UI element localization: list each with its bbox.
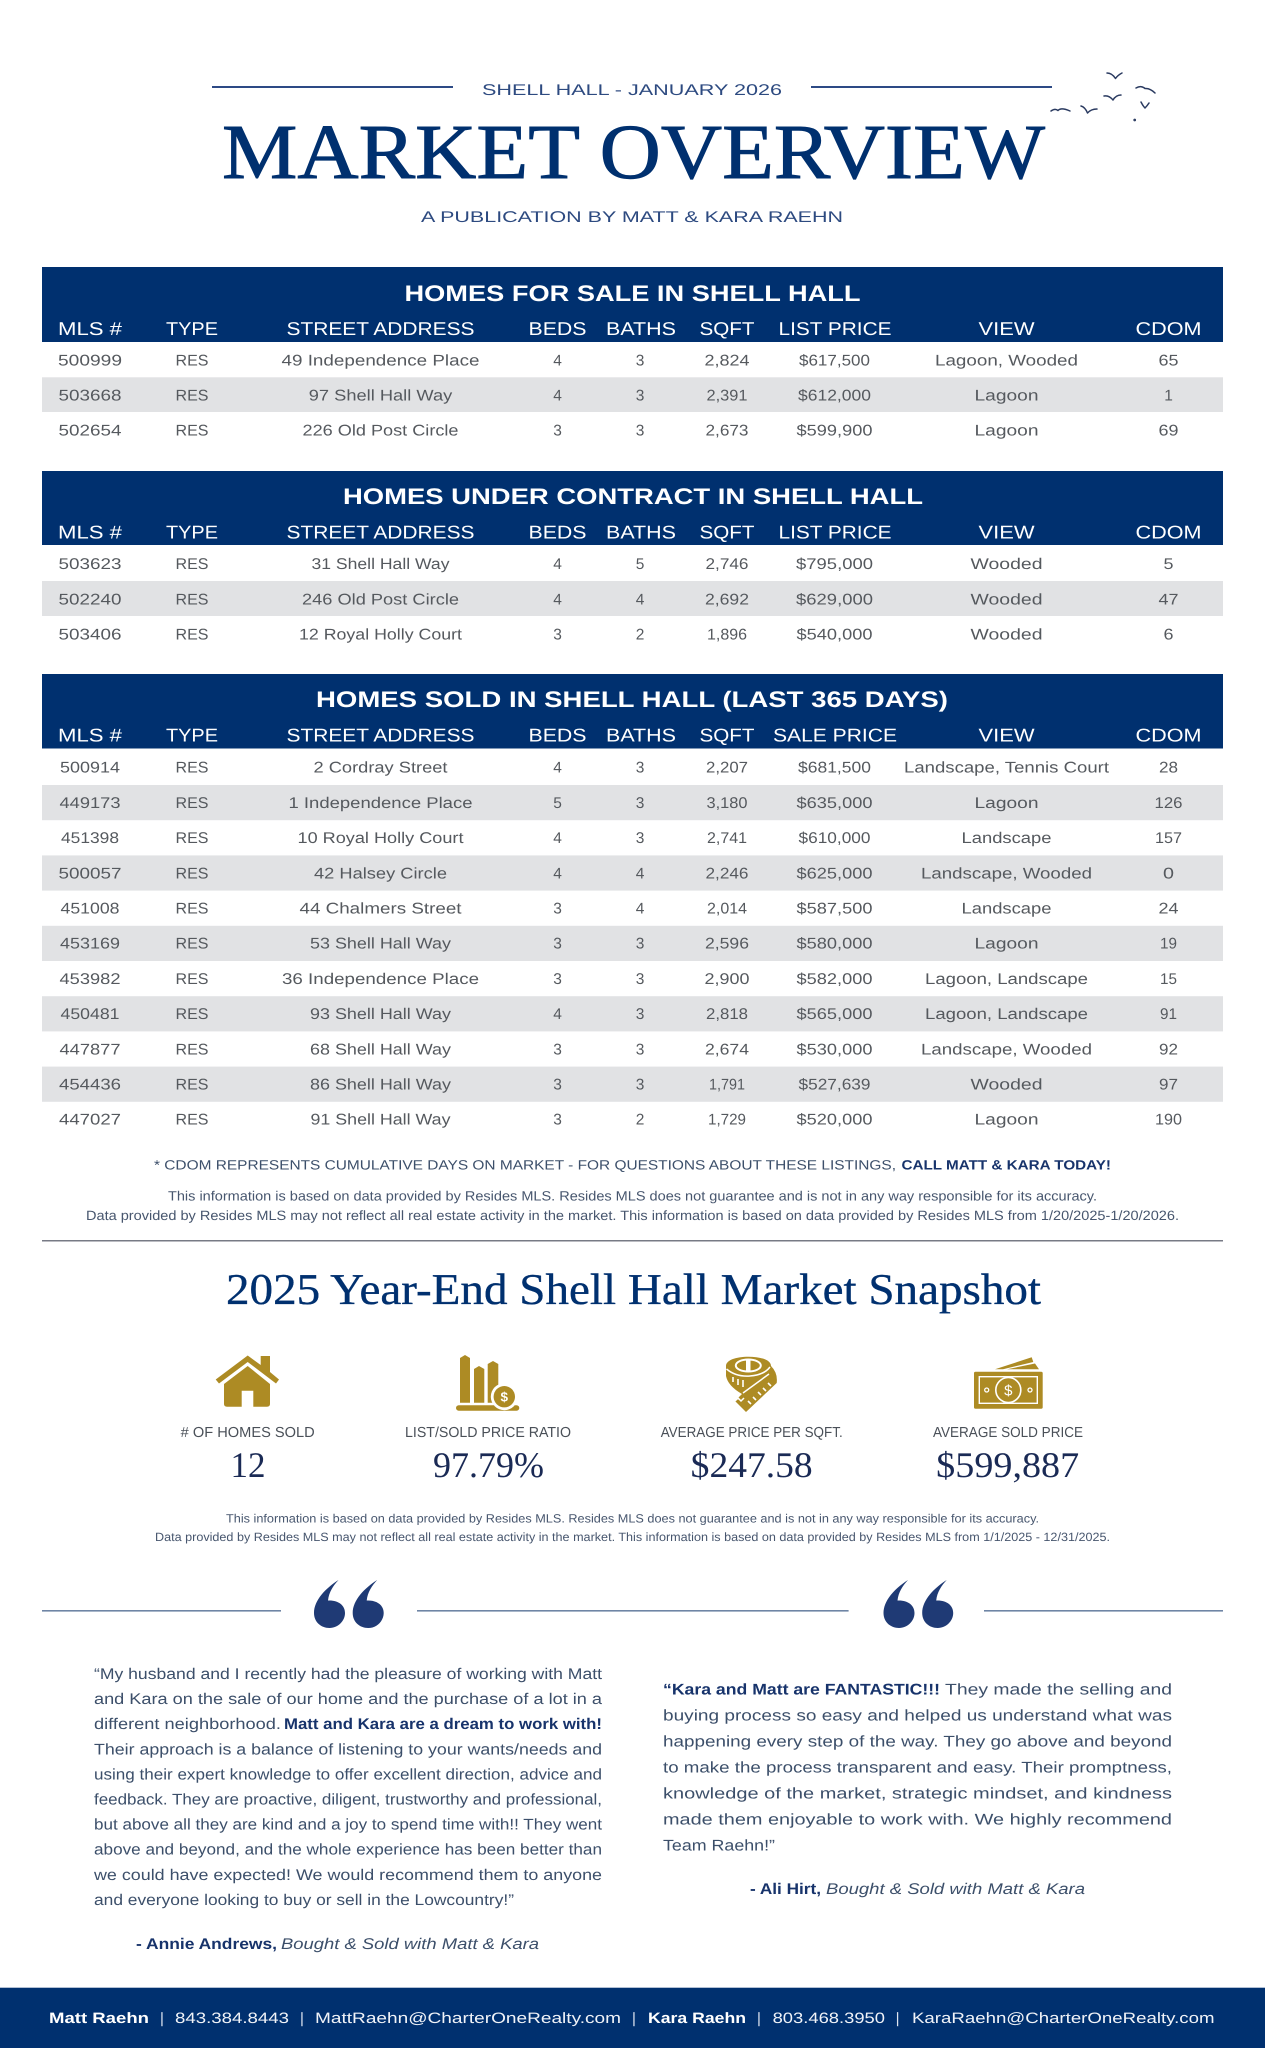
row: 500914 bbox=[60, 760, 1178, 777]
icon: banknotes: $ bbox=[1004, 1382, 1013, 1400]
row: 453982: Lagoon, Landscape bbox=[925, 971, 1088, 988]
row: 449173: 126 bbox=[1154, 795, 1182, 812]
row: 449173: 1 Independence Place bbox=[288, 795, 472, 812]
row: 451008: 44 Chalmers Street bbox=[300, 900, 462, 918]
row: 453169: 3 bbox=[636, 936, 644, 953]
column headers: VIEW bbox=[978, 724, 1035, 746]
row: 451398: Landscape bbox=[962, 830, 1052, 847]
row: 500057: 500057 bbox=[58, 865, 122, 882]
row: 451398: 451398 bbox=[61, 830, 119, 847]
testimonial: Ali Hirt: Team Raehn!” bbox=[663, 1837, 775, 1854]
disclaimer: snapshot data bbox=[155, 1512, 1110, 1544]
row: 500057: 4 bbox=[636, 865, 645, 882]
row: 503668 bbox=[58, 388, 1173, 405]
row: 451398 bbox=[61, 830, 1182, 847]
row: 500914: 4 bbox=[553, 760, 562, 777]
row: 447027: 1,729 bbox=[708, 1112, 746, 1129]
row: 451008 bbox=[60, 900, 1179, 918]
row: 502240: 502240 bbox=[58, 591, 122, 608]
label: AVERAGE SOLD PRICE bbox=[933, 1425, 1083, 1441]
testimonial: Ali Hirt: knowledge of the market, strategic mindset, and kindness bbox=[663, 1785, 1172, 1802]
row: 451398: 10 Royal Holly Court bbox=[298, 830, 464, 847]
row: 500914: 28 bbox=[1159, 760, 1178, 777]
row: 453982 bbox=[60, 971, 1177, 988]
row: 453982: 2,900 bbox=[704, 971, 750, 988]
column headers: MLS # bbox=[58, 724, 123, 746]
row: 500057: 42 Halsey Circle bbox=[314, 865, 447, 882]
row: 502240: 4 bbox=[636, 591, 645, 608]
footer: contact bar: Kara Raehn bbox=[648, 2010, 746, 2027]
row: 500057: 4 bbox=[553, 865, 562, 882]
row: 500914: RES bbox=[176, 760, 208, 777]
testimonial: Ali Hirt: to make the process transparent and easy. Their promptness, bbox=[663, 1759, 1172, 1776]
testimonial: Annie Andrews: different neighborhood. bbox=[94, 1716, 281, 1733]
stat: list/sold price ratio bbox=[405, 1355, 571, 1485]
row: 502240: 47 bbox=[1158, 591, 1178, 608]
row: 447877: $530,000 bbox=[796, 1041, 873, 1058]
row: 503623: 5 bbox=[1164, 556, 1174, 573]
row: 450481 bbox=[60, 1006, 1177, 1023]
footnote: CDOM note and call to action bbox=[154, 1158, 1111, 1172]
disclaimer: listings data: Data provided by Resides MLS may not reflect all real estate activity in the market. This information is based on data provided by Resides MLS from 1/20/2025-1/20/2026. bbox=[86, 1208, 1179, 1223]
row: 453169: 2,596 bbox=[705, 936, 749, 953]
row: 503668: $612,000 bbox=[798, 388, 871, 405]
testimonial: Annie Andrews: “My husband and I recently had the pleasure of working with Matt bbox=[94, 1666, 603, 1683]
row: 453982: $582,000 bbox=[796, 971, 873, 988]
row: 500999: 2,824 bbox=[704, 352, 750, 370]
footer: contact bar: KaraRaehn@CharterOneRealty.com bbox=[912, 2010, 1214, 2027]
row: 503668: RES bbox=[176, 388, 208, 405]
row: 454436: 86 Shell Hall Way bbox=[310, 1076, 451, 1094]
row: 502240: 4 bbox=[553, 591, 562, 608]
column headers bbox=[58, 522, 1202, 543]
label: AVERAGE PRICE PER SQFT. bbox=[661, 1425, 843, 1441]
row: 451008: Landscape bbox=[962, 900, 1052, 918]
testimonial: Ali Hirt: buying process so easy and helped us understand what was bbox=[663, 1707, 1172, 1724]
icon: left quotation mark bbox=[314, 1580, 384, 1628]
testimonial: Ali Hirt: happening every step of the way. They go above and beyond bbox=[663, 1733, 1172, 1750]
row: 502240: Wooded bbox=[970, 591, 1042, 608]
panel: homes under contract table bbox=[42, 471, 1223, 643]
value: 12 bbox=[230, 1445, 266, 1485]
row: 447877: 3 bbox=[636, 1041, 644, 1058]
footer: contact bar bbox=[0, 1988, 1265, 2048]
row: 450481: RES bbox=[176, 1006, 208, 1023]
row: 450481: 93 Shell Hall Way bbox=[310, 1006, 451, 1023]
row: 502240: 246 Old Post Circle bbox=[302, 591, 459, 608]
row: 500914: 500914 bbox=[60, 760, 120, 777]
row: 449173: 3 bbox=[636, 795, 644, 812]
column headers: SQFT bbox=[700, 318, 754, 339]
stat: average sold price bbox=[933, 1357, 1083, 1485]
row: 449173: Lagoon bbox=[974, 795, 1038, 812]
row: 500914: Landscape, Tennis Court bbox=[904, 760, 1110, 777]
row: 502654: RES bbox=[176, 423, 208, 440]
row: 503406: 12 Royal Holly Court bbox=[299, 626, 463, 643]
row: 451008: 451008 bbox=[60, 900, 120, 918]
row: 503406: 3 bbox=[553, 626, 562, 643]
row: 453982: 453982 bbox=[60, 971, 120, 988]
footer: contact bar: MattRaehn@CharterOneRealty.com bbox=[315, 2010, 621, 2027]
row: 449173 bbox=[60, 795, 1182, 812]
column headers: BATHS bbox=[606, 318, 676, 339]
icon: measuring tape bbox=[726, 1357, 777, 1412]
row: 503406: 503406 bbox=[58, 626, 122, 643]
row: 447027: RES bbox=[176, 1112, 208, 1129]
row: 453169: 19 bbox=[1160, 936, 1177, 953]
row: 449173: 3,180 bbox=[706, 795, 748, 812]
stat: homes sold bbox=[181, 1356, 315, 1485]
footer: contact bar: | bbox=[757, 2010, 761, 2027]
footer: contact bar: 803.468.3950 bbox=[773, 2010, 885, 2027]
row: 503668: 1 bbox=[1164, 388, 1173, 405]
column headers: LIST PRICE bbox=[778, 522, 892, 543]
attribution: - Annie Andrews, bbox=[136, 1936, 277, 1953]
column headers: SALE PRICE bbox=[773, 724, 897, 746]
icon: bar chart with coin bbox=[456, 1355, 519, 1411]
icon: right testimonial quotation mark bbox=[884, 1580, 953, 1628]
row: 450481: 450481 bbox=[60, 1006, 120, 1023]
row: 503406: 2 bbox=[636, 626, 644, 643]
disclaimer: listings data bbox=[86, 1189, 1179, 1223]
testimonial: Ali Hirt: They made the selling and bbox=[945, 1681, 1172, 1698]
row: 502654: 3 bbox=[636, 423, 644, 440]
row: 503623: $795,000 bbox=[796, 556, 873, 573]
row: 447027: 2 bbox=[636, 1112, 644, 1129]
row: 500999: 500999 bbox=[58, 352, 122, 370]
column headers: TYPE bbox=[166, 724, 218, 746]
disclaimer: listings data: This information is based on data provided by Resides MLS. Resides MLS does not guarantee and is not in any way responsible for its accuracy. bbox=[168, 1189, 1097, 1204]
column headers: BEDS bbox=[528, 522, 586, 543]
row: 447027: 3 bbox=[553, 1112, 562, 1129]
column headers: VIEW bbox=[978, 318, 1035, 339]
row: 503668: 503668 bbox=[58, 388, 122, 405]
row: 500914: $681,500 bbox=[798, 760, 871, 777]
row: 503668: 2,391 bbox=[706, 388, 748, 405]
row: 500057: $625,000 bbox=[796, 865, 873, 882]
row: 454436: 97 bbox=[1159, 1076, 1178, 1094]
row: 500057: 2,246 bbox=[706, 865, 748, 882]
icon: flock of birds bbox=[1051, 73, 1155, 121]
row: 500057: RES bbox=[176, 865, 208, 882]
testimonial: Annie Andrews: and everyone looking to buy or sell in the Lowcountry!” bbox=[94, 1892, 514, 1909]
column headers: BATHS bbox=[606, 724, 676, 746]
icon: bar chart with coin: $ bbox=[501, 1390, 509, 1404]
row: 503406: 6 bbox=[1164, 626, 1174, 643]
row: 502654: $599,900 bbox=[796, 423, 873, 440]
column headers: BEDS bbox=[528, 724, 586, 746]
value: $247.58 bbox=[691, 1445, 813, 1485]
row: 500999: 4 bbox=[553, 352, 562, 370]
row: 500999 bbox=[58, 352, 1178, 370]
row: 500057: 0 bbox=[1163, 865, 1174, 882]
testimonial: Ali Hirt: “Kara and Matt are FANTASTIC!!! bbox=[663, 1681, 940, 1698]
row: 449173: 5 bbox=[553, 795, 562, 812]
attribution bbox=[136, 1936, 539, 1953]
row: 447877: 68 Shell Hall Way bbox=[310, 1041, 451, 1058]
row: 500999: 49 Independence Place bbox=[282, 352, 480, 370]
footer: contact bar: | bbox=[632, 2010, 636, 2027]
row: 447027: 91 Shell Hall Way bbox=[310, 1112, 451, 1129]
row: 453169: 3 bbox=[553, 936, 562, 953]
row: 449173: $635,000 bbox=[796, 795, 873, 812]
row: 453169: RES bbox=[176, 936, 208, 953]
row: 503623: 2,746 bbox=[706, 556, 748, 573]
header bbox=[212, 73, 1155, 226]
column headers: SQFT bbox=[700, 724, 754, 746]
row: 447027 bbox=[59, 1112, 1182, 1129]
row: 451008: 4 bbox=[636, 900, 645, 918]
row: 447877: RES bbox=[176, 1041, 208, 1058]
row: 503668: 3 bbox=[636, 388, 644, 405]
row: 451008: 3 bbox=[553, 900, 562, 918]
stat: average price per sqft bbox=[661, 1357, 843, 1485]
row: 454436: Wooded bbox=[970, 1076, 1042, 1094]
row: 503623: 4 bbox=[553, 556, 562, 573]
testimonial: Annie Andrews: Their approach is a balance of listening to your wants/needs and bbox=[94, 1741, 602, 1758]
row: 502654: Lagoon bbox=[974, 423, 1038, 440]
row: 453982: 3 bbox=[553, 971, 562, 988]
row: 451398: 3 bbox=[636, 830, 644, 847]
testimonial: Annie Andrews: but above all they are kind and a joy to spend time with!! They went bbox=[94, 1817, 603, 1834]
row: 503623: 31 Shell Hall Way bbox=[312, 556, 450, 573]
column headers bbox=[58, 724, 1202, 746]
value: $599,887 bbox=[936, 1445, 1079, 1485]
row: 450481: 2,818 bbox=[706, 1006, 748, 1023]
panel: homes for sale table bbox=[42, 267, 1223, 440]
row: 503623: RES bbox=[176, 556, 208, 573]
row: 503623: 5 bbox=[636, 556, 644, 573]
icon: banknotes bbox=[974, 1357, 1043, 1409]
row: 449173: RES bbox=[176, 795, 208, 812]
row: 451398: RES bbox=[176, 830, 208, 847]
column headers: CDOM bbox=[1136, 522, 1202, 543]
row: 450481: 4 bbox=[553, 1006, 562, 1023]
row: 500999: 65 bbox=[1158, 352, 1178, 370]
value: 97.79% bbox=[433, 1445, 544, 1485]
column headers: STREET ADDRESS bbox=[286, 318, 474, 339]
row: 453169: Lagoon bbox=[974, 936, 1038, 953]
row: 503406 bbox=[58, 626, 1174, 643]
row: 503668: Lagoon bbox=[974, 388, 1038, 405]
label: # OF HOMES SOLD bbox=[181, 1425, 315, 1441]
publication line: A PUBLICATION BY MATT & KARA RAEHN bbox=[421, 209, 843, 226]
column headers: BATHS bbox=[606, 522, 676, 543]
testimonial: Annie Andrews: we could have expected! We would recommend them to anyone bbox=[93, 1867, 602, 1884]
disclaimer: snapshot data: This information is based on data provided by Resides MLS. Resides MLS does not guarantee and is not in any way responsible for its accuracy. bbox=[226, 1512, 1039, 1526]
row: 451398: 2,741 bbox=[707, 830, 747, 847]
row: 503406: RES bbox=[176, 626, 208, 643]
row: 447877: 447877 bbox=[60, 1041, 120, 1058]
row: 502240: 2,692 bbox=[705, 591, 749, 608]
row: 447027: Lagoon bbox=[974, 1112, 1038, 1129]
row: 447877: 2,674 bbox=[705, 1041, 749, 1058]
row: 502240: $629,000 bbox=[796, 591, 873, 608]
row: 453982: 15 bbox=[1160, 971, 1177, 988]
row: 500914: 3 bbox=[636, 760, 644, 777]
row: 502240: RES bbox=[176, 591, 208, 608]
row: 503668: 4 bbox=[553, 388, 562, 405]
row: 502654: 502654 bbox=[58, 423, 122, 440]
row: 447877: Landscape, Wooded bbox=[921, 1041, 1092, 1058]
row: 454436: 454436 bbox=[59, 1076, 121, 1094]
column headers: STREET ADDRESS bbox=[286, 724, 474, 746]
row: 453982: RES bbox=[176, 971, 208, 988]
column headers: CDOM bbox=[1136, 724, 1202, 746]
row: 454436: $527,639 bbox=[798, 1076, 870, 1094]
row: 453169 bbox=[60, 936, 1177, 953]
row: 502654: 2,673 bbox=[706, 423, 748, 440]
row: 453169: 453169 bbox=[60, 936, 120, 953]
row: 451008: RES bbox=[176, 900, 208, 918]
table heading: HOMES FOR SALE IN SHELL HALL bbox=[404, 281, 861, 306]
row: 500914: 2,207 bbox=[706, 760, 748, 777]
table heading: HOMES SOLD IN SHELL HALL (LAST 365 DAYS) bbox=[316, 687, 948, 712]
row: 500057 bbox=[58, 865, 1174, 882]
row: 454436: RES bbox=[176, 1076, 208, 1094]
column headers: VIEW bbox=[978, 522, 1035, 543]
footnote: CDOM note and call to action: CALL MATT & KARA TODAY! bbox=[902, 1158, 1111, 1172]
column headers: CDOM bbox=[1136, 318, 1202, 339]
column headers: SQFT bbox=[700, 522, 754, 543]
row: 454436: 3 bbox=[553, 1076, 562, 1094]
row: 454436: 1,791 bbox=[709, 1076, 745, 1094]
column headers: BEDS bbox=[528, 318, 586, 339]
row: 454436 bbox=[59, 1076, 1178, 1094]
row: 503623 bbox=[58, 556, 1174, 573]
row: 450481: 3 bbox=[636, 1006, 644, 1023]
row: 502654 bbox=[58, 423, 1178, 440]
row: 453982: 36 Independence Place bbox=[282, 971, 479, 988]
footer: contact bar: | bbox=[896, 2010, 900, 2027]
row: 451008: 24 bbox=[1158, 900, 1179, 918]
row: 447877 bbox=[60, 1041, 1178, 1058]
icon: house bbox=[216, 1356, 279, 1407]
row: 447027: $520,000 bbox=[796, 1112, 873, 1129]
attribution: Bought & Sold with Matt & Kara bbox=[281, 1936, 539, 1953]
row: 453169: $580,000 bbox=[796, 936, 873, 953]
row: 451008: $587,500 bbox=[796, 900, 873, 918]
row: 450481: $565,000 bbox=[796, 1006, 873, 1023]
row: 503623: 503623 bbox=[58, 556, 122, 573]
column headers: TYPE bbox=[166, 522, 218, 543]
testimonial: Annie Andrews bbox=[93, 1666, 603, 1953]
row: 447027: 190 bbox=[1155, 1112, 1182, 1129]
column headers: STREET ADDRESS bbox=[286, 522, 474, 543]
column headers bbox=[58, 318, 1202, 339]
title: MARKET OVERVIEW bbox=[222, 108, 1045, 195]
row: 451398: 4 bbox=[553, 830, 562, 847]
table heading: HOMES UNDER CONTRACT IN SHELL HALL bbox=[343, 484, 923, 509]
row: 500057: Landscape, Wooded bbox=[921, 865, 1092, 882]
testimonial: Annie Andrews: above and beyond, and the whole experience has been better than bbox=[94, 1842, 602, 1859]
row: 447877: 92 bbox=[1159, 1041, 1178, 1058]
attribution: - Ali Hirt, bbox=[750, 1881, 821, 1898]
row: 502654: 3 bbox=[553, 423, 562, 440]
footer: contact bar: | bbox=[160, 2010, 164, 2027]
testimonial: Annie Andrews: using their expert knowledge to offer excellent direction, advice and bbox=[94, 1766, 602, 1783]
attribution bbox=[750, 1881, 1085, 1898]
row: 449173: 449173 bbox=[60, 795, 120, 812]
row: 450481: 91 bbox=[1160, 1006, 1177, 1023]
row: 500999: RES bbox=[176, 352, 208, 370]
row: 503406: 1,896 bbox=[707, 626, 747, 643]
row: 453982: 3 bbox=[636, 971, 644, 988]
row: 450481: Lagoon, Landscape bbox=[925, 1006, 1088, 1023]
footer: contact bar: 843.384.8443 bbox=[175, 2010, 289, 2027]
column headers: MLS # bbox=[58, 522, 123, 543]
column headers: LIST PRICE bbox=[778, 318, 892, 339]
testimonial: Ali Hirt bbox=[663, 1681, 1172, 1898]
attribution: Bought & Sold with Matt & Kara bbox=[826, 1881, 1085, 1898]
row: 502240 bbox=[58, 591, 1178, 608]
column headers: MLS # bbox=[58, 318, 123, 339]
row: 451398: 157 bbox=[1155, 830, 1182, 847]
row: 500999: 3 bbox=[636, 352, 644, 370]
row: 454436: 3 bbox=[636, 1076, 644, 1094]
footer: contact bar: | bbox=[300, 2010, 304, 2027]
row: 451008: 2,014 bbox=[707, 900, 747, 918]
testimonial: Annie Andrews: and Kara on the sale of our home and the purchase of a lot in a bbox=[94, 1691, 602, 1708]
row: 447027: 447027 bbox=[59, 1112, 121, 1129]
row: 451398: $610,000 bbox=[798, 830, 871, 847]
label: LIST/SOLD PRICE RATIO bbox=[405, 1425, 571, 1441]
testimonial: Annie Andrews: Matt and Kara are a dream to work with! bbox=[284, 1716, 602, 1733]
snapshot heading: 2025 Year-End Shell Hall Market Snapshot bbox=[226, 1265, 1041, 1314]
row: 502654: 69 bbox=[1158, 423, 1178, 440]
row: 503406: $540,000 bbox=[796, 626, 873, 643]
subtitle: location and date: SHELL HALL - JANUARY 2026 bbox=[482, 82, 782, 99]
footer: contact bar: Matt Raehn bbox=[49, 2010, 149, 2027]
testimonial: Annie Andrews: feedback. They are proactive, diligent, trustworthy and professional, bbox=[94, 1792, 602, 1808]
panel: homes sold table bbox=[42, 674, 1223, 1129]
row: 503406: Wooded bbox=[970, 626, 1042, 643]
column headers: TYPE bbox=[166, 318, 218, 339]
testimonial: Ali Hirt: made them enjoyable to work with. We highly recommend bbox=[663, 1811, 1172, 1828]
row: 503668: 97 Shell Hall Way bbox=[309, 388, 453, 405]
disclaimer: snapshot data: Data provided by Resides MLS may not reflect all real estate activity in the market. This information is based on data provided by Resides MLS from 1/1/2025 - 12/31/2025. bbox=[155, 1530, 1110, 1544]
row: 500914: 2 Cordray Street bbox=[314, 760, 448, 777]
footnote: CDOM note and call to action: * CDOM REPRESENTS CUMULATIVE DAYS ON MARKET - FOR QUESTIONS ABOUT THESE LISTINGS, bbox=[154, 1158, 896, 1172]
row: 503623: Wooded bbox=[970, 556, 1042, 573]
row: 502654: 226 Old Post Circle bbox=[302, 423, 458, 440]
row: 447877: 3 bbox=[553, 1041, 562, 1058]
row: 500999: Lagoon, Wooded bbox=[935, 352, 1078, 370]
row: 500999: $617,500 bbox=[799, 352, 870, 370]
row: 453169: 53 Shell Hall Way bbox=[310, 936, 451, 953]
